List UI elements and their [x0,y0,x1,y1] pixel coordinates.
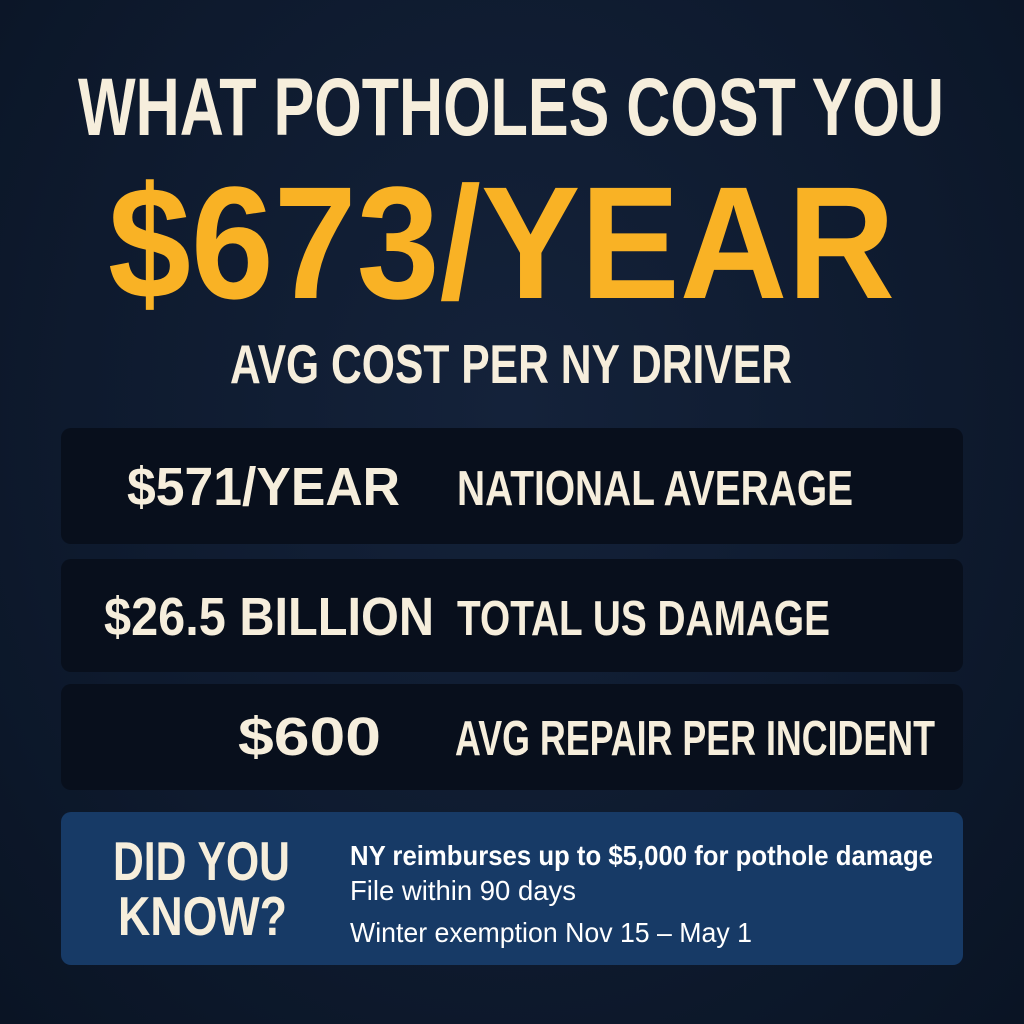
facts list: NY reimburses up to $5,000 for pothole damage [350,840,933,871]
did you know heading: DID YOU [113,830,290,892]
subtitle: AVG COST PER NY DRIVER [230,333,792,395]
panel: avg repair [61,684,963,790]
panel: total US damage: $26.5 BILLION [104,587,434,647]
panel: total US damage: TOTAL US DAMAGE [457,592,830,646]
facts list [350,840,933,948]
did you know heading [113,830,290,947]
panel: did you know [61,812,963,965]
panel: national average [61,428,963,544]
panel: national average: NATIONAL AVERAGE [457,462,853,516]
facts list: File within 90 days [350,875,576,906]
panel: avg repair: $600 [238,707,381,767]
did you know heading: KNOW? [118,885,287,947]
panel: total US damage [61,559,963,672]
facts list: Winter exemption Nov 15 – May 1 [350,917,752,948]
headline figure: $673/YEAR [108,153,895,332]
panel: national average: $571/YEAR [127,457,400,517]
